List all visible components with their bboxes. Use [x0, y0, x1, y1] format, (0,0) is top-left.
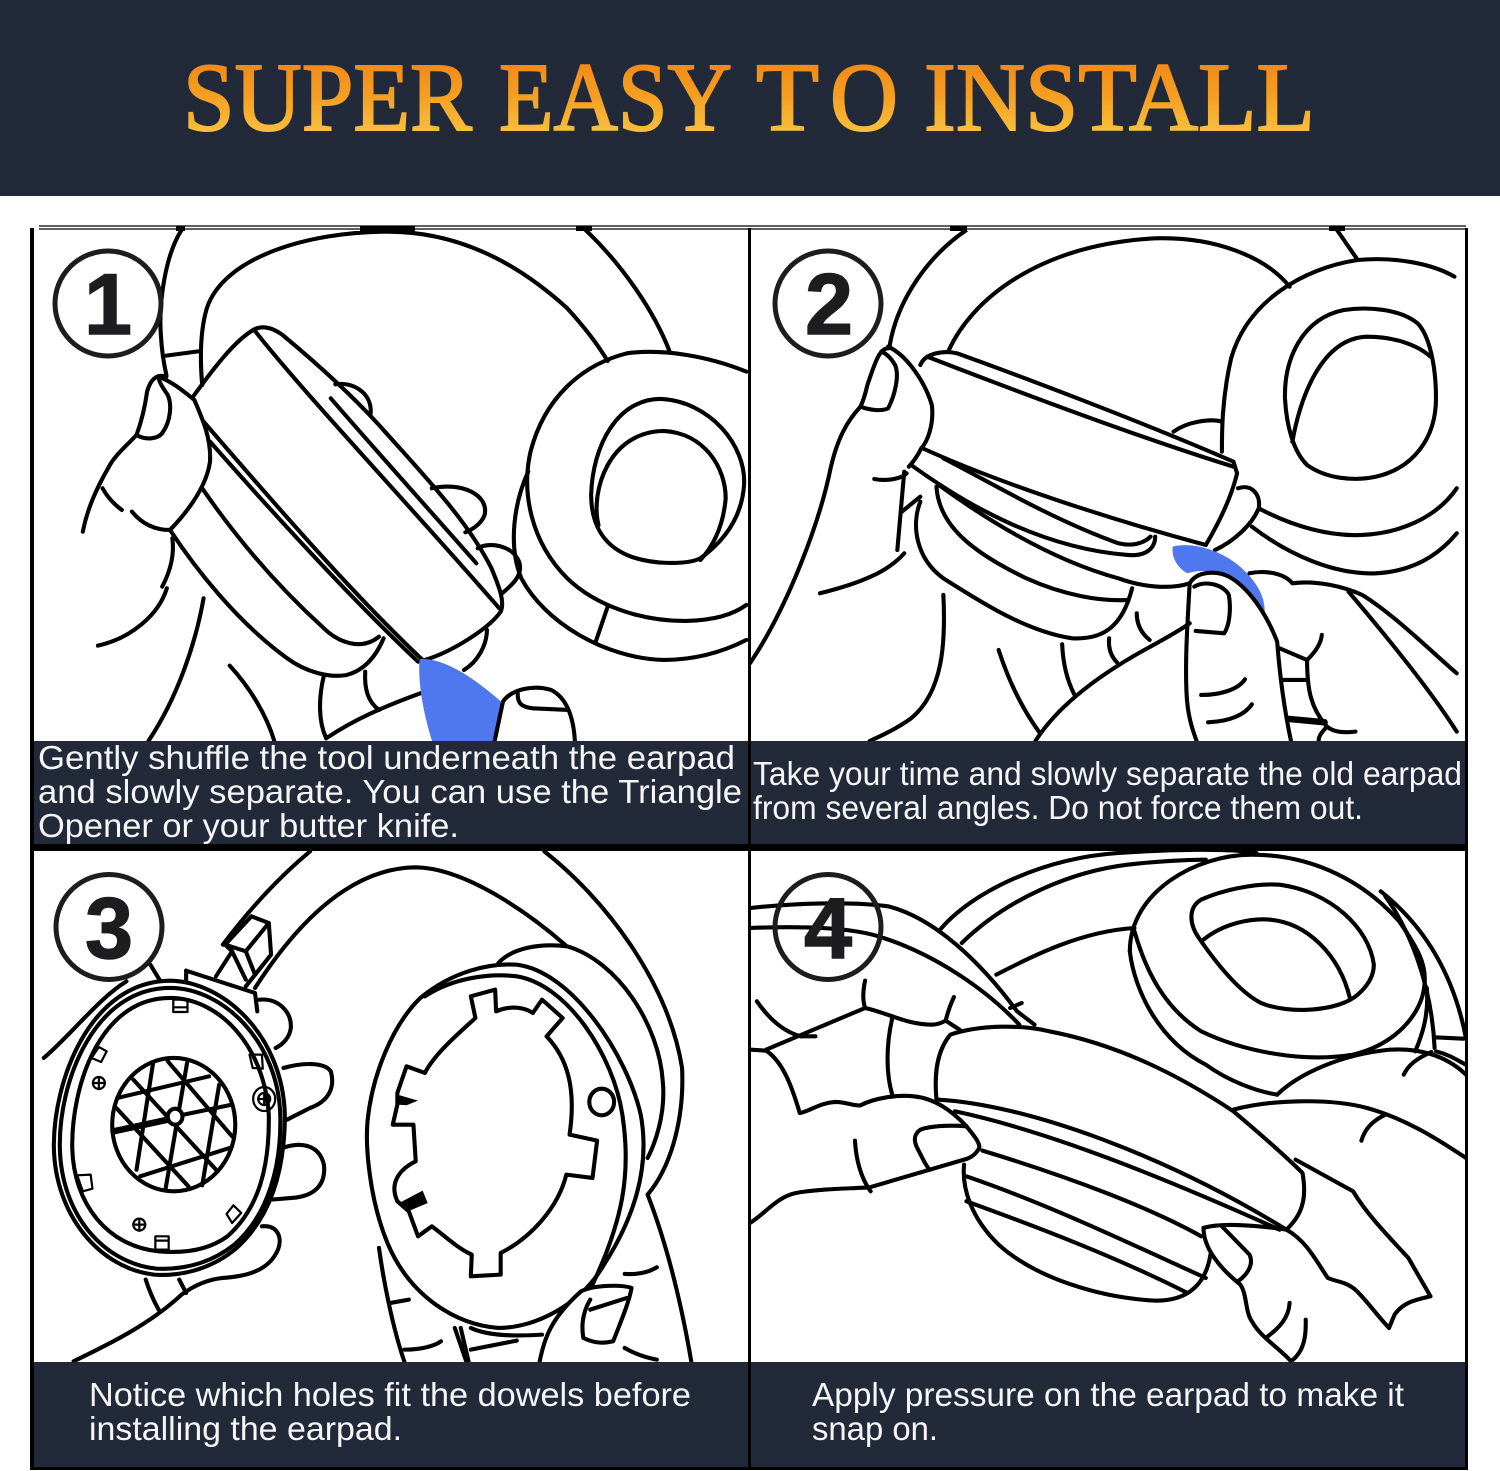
step number 3: [56, 874, 162, 980]
step number 1: 1: [84, 257, 132, 353]
headband: [223, 851, 691, 1361]
headband: [890, 230, 1358, 350]
left hand: [750, 347, 1190, 741]
right hand with thumb: [1186, 572, 1457, 741]
panel: step 2 illustration: [750, 230, 1457, 741]
earcup pressed in hands: [936, 1027, 1304, 1301]
title: INSTALL: [924, 44, 1315, 152]
caption: step 1: and slowly separate. You can use the Triangle: [38, 773, 742, 810]
title: SUPER: [183, 44, 473, 152]
right hand: [1203, 1160, 1430, 1361]
panel: step 1 illustration: [83, 230, 746, 745]
caption: step 3: [34, 1362, 748, 1467]
title banner: [0, 0, 1500, 196]
left hand: [44, 965, 332, 1361]
caption: step 3: Notice which holes fit the dowels before: [89, 1376, 691, 1413]
headband: [160, 230, 670, 385]
panel: step 4 illustration: [750, 850, 1466, 1361]
icon: blue triangle opener: [1172, 545, 1265, 613]
earcup held in hand: [170, 327, 502, 676]
fingers behind earcup: [335, 384, 520, 593]
thumb holding opener: [494, 688, 575, 745]
step number 2: 2: [805, 257, 853, 353]
caption: step 2: Take your time and slowly separate the old earpad: [753, 755, 1462, 792]
caption: step 3: installing the earpad.: [89, 1410, 402, 1447]
left hand: [83, 376, 487, 741]
left hand: [750, 981, 979, 1223]
title: [183, 44, 1315, 152]
caption: step 1: Gently shuffle the tool underneath the earpad: [38, 739, 735, 776]
detached earcup plate: [54, 981, 285, 1275]
strap and right arm: [1233, 891, 1466, 1158]
caption: step 2: [751, 741, 1465, 844]
step number 1: [55, 251, 161, 356]
right hand: [379, 1248, 657, 1361]
headband: [750, 850, 1256, 1025]
screws and clips: [77, 1000, 275, 1250]
panel: step 3 illustration: [44, 851, 691, 1361]
icon: blue triangle opener: [419, 659, 503, 745]
caption: step 2: from several angles. Do not force them out.: [753, 789, 1363, 826]
caption: step 1: [34, 739, 748, 844]
step number 4: 4: [804, 881, 852, 977]
caption: step 4: [751, 1362, 1465, 1467]
caption: step 4: snap on.: [812, 1410, 938, 1447]
title: T: [756, 44, 819, 152]
step number 4: [775, 874, 881, 980]
right earpad: [1222, 259, 1457, 573]
title: EASY: [499, 44, 732, 152]
earcup without earpad, right: [367, 945, 663, 1328]
speaker grille: [112, 1058, 235, 1191]
caption: step 4: Apply pressure on the earpad to make it: [812, 1376, 1404, 1413]
earpad: [1130, 855, 1425, 1095]
hinge connector: [186, 916, 271, 1011]
title: O: [830, 44, 898, 152]
earcup: [911, 352, 1237, 638]
caption: step 1: Opener or your butter knife.: [38, 807, 459, 844]
right earpad: [514, 352, 746, 660]
fingers behind earcup: [1174, 420, 1259, 550]
step number 2: [775, 251, 881, 356]
step number 3: 3: [85, 881, 133, 977]
